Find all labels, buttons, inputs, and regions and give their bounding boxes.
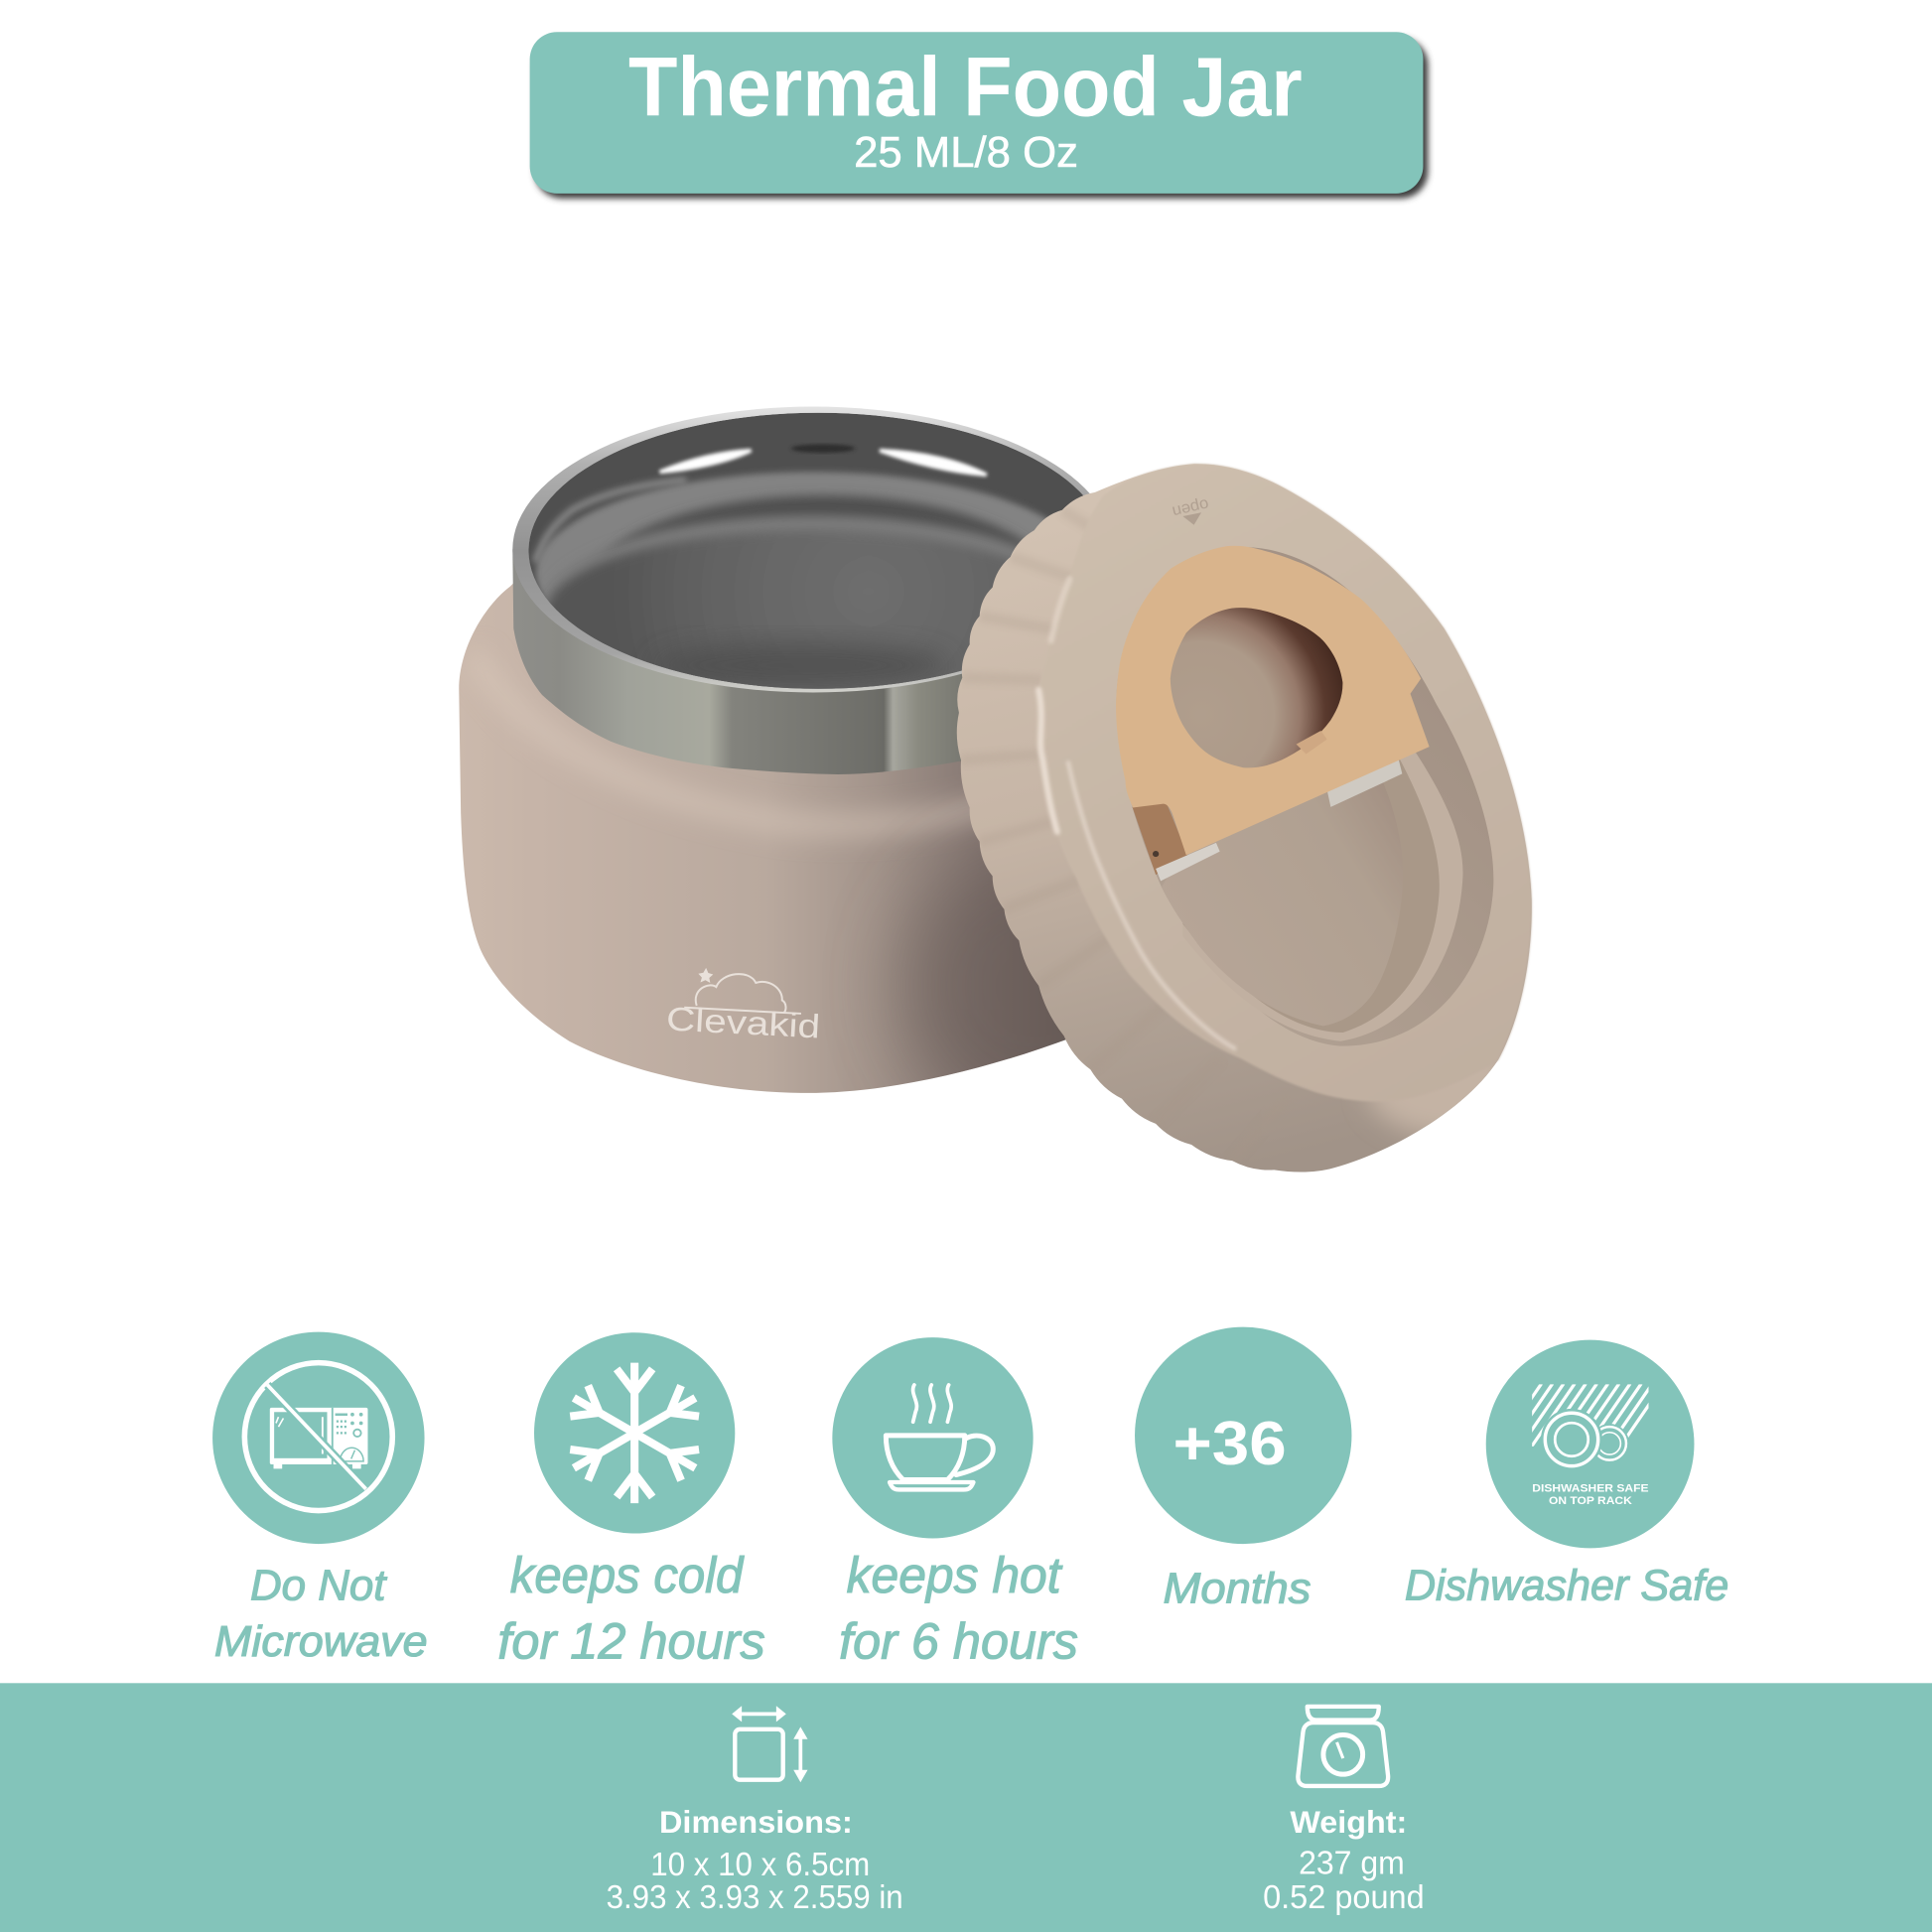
- icon: dimensions: [732, 1706, 808, 1782]
- weight heading: Weight:: [1290, 1805, 1407, 1840]
- open text: open: [1171, 495, 1210, 521]
- label: do not microwave: Microwave: [214, 1618, 428, 1666]
- icon: snowflake: [534, 1332, 735, 1534]
- label: keeps cold: for 12 hours: [497, 1612, 765, 1669]
- weight in pounds: 0.52 pound: [1263, 1879, 1425, 1916]
- weight in grams: 237 gm: [1299, 1845, 1405, 1881]
- handle inner tab: [1297, 731, 1327, 755]
- open marker: [1171, 495, 1210, 525]
- brand name: Clevakid: [665, 1001, 821, 1046]
- brand logo: Clevakid: [665, 966, 823, 1046]
- label: do not microwave: [214, 1563, 428, 1666]
- icon: dishwasher plates: ON TOP RACK: [1549, 1495, 1632, 1507]
- open arrow: [1182, 512, 1201, 525]
- label: do not microwave: Do Not: [250, 1563, 387, 1610]
- dimensions block: [607, 1706, 903, 1916]
- icon: dishwasher plates: DISHWASHER SAFE: [1532, 1482, 1649, 1494]
- label: keeps hot: keeps hot: [847, 1547, 1062, 1603]
- steel collar: [512, 542, 1109, 774]
- feature: keeps cold: [497, 1332, 765, 1669]
- title: Thermal Food Jar: [628, 41, 1303, 134]
- lid: [957, 464, 1540, 1173]
- icon: hot cup: [832, 1337, 1034, 1538]
- dimensions imperial: 3.93 x 3.93 x 2.559 in: [607, 1879, 903, 1916]
- jar body: [459, 584, 1066, 1093]
- lid gloss highlights: [1038, 579, 1235, 1048]
- label: keeps hot: for 6 hours: [839, 1612, 1078, 1669]
- label: keeps cold: [497, 1547, 765, 1669]
- jar interior: [528, 413, 1108, 694]
- bottom specification band: [0, 1683, 1932, 1932]
- lid recess: [1116, 547, 1493, 1046]
- cloud logo: [684, 971, 803, 1014]
- title banner: [530, 32, 1428, 199]
- weight block: [1263, 1707, 1425, 1916]
- dimensions heading: Dimensions:: [659, 1805, 853, 1840]
- handle hole: [1171, 608, 1342, 767]
- banner panel: [530, 32, 1423, 194]
- subtitle capacity: 25 ML/8 Oz: [854, 129, 1078, 177]
- label: months: Months: [1164, 1566, 1311, 1613]
- badge: +36: [1135, 1327, 1351, 1544]
- dimensions metric: 10 x 10 x 6.5cm: [650, 1847, 870, 1883]
- lid face: [1035, 464, 1532, 1102]
- steel collar rim: [512, 407, 1114, 692]
- star: [698, 968, 714, 983]
- badge: +36: +36: [1173, 1410, 1287, 1478]
- product photo: thermal food jar with open lid: [459, 407, 1540, 1173]
- feature: 36 months: [1135, 1327, 1351, 1613]
- icon: kitchen scale: [1298, 1707, 1388, 1786]
- tan handle: [1116, 546, 1430, 855]
- recess floor: [1162, 770, 1403, 1026]
- banner shadow: [535, 38, 1428, 199]
- label: dishwasher safe: Dishwasher Safe: [1405, 1563, 1728, 1610]
- recess inner ridge: [1182, 727, 1463, 1041]
- feature: dishwasher safe: [1405, 1340, 1728, 1610]
- icon: dishwasher plates: [1476, 1340, 1694, 1548]
- label: keeps cold: keeps cold: [510, 1547, 745, 1603]
- feature: do not microwave: [212, 1332, 428, 1666]
- feature: keeps hot: [832, 1337, 1078, 1669]
- hinge parts: [1133, 759, 1402, 881]
- label: keeps hot: [839, 1547, 1078, 1669]
- band background: [0, 1683, 1932, 1932]
- icon: no microwave: [212, 1332, 425, 1544]
- lid ribbed side: [957, 464, 1540, 1173]
- recess inner channel: [1182, 746, 1440, 1033]
